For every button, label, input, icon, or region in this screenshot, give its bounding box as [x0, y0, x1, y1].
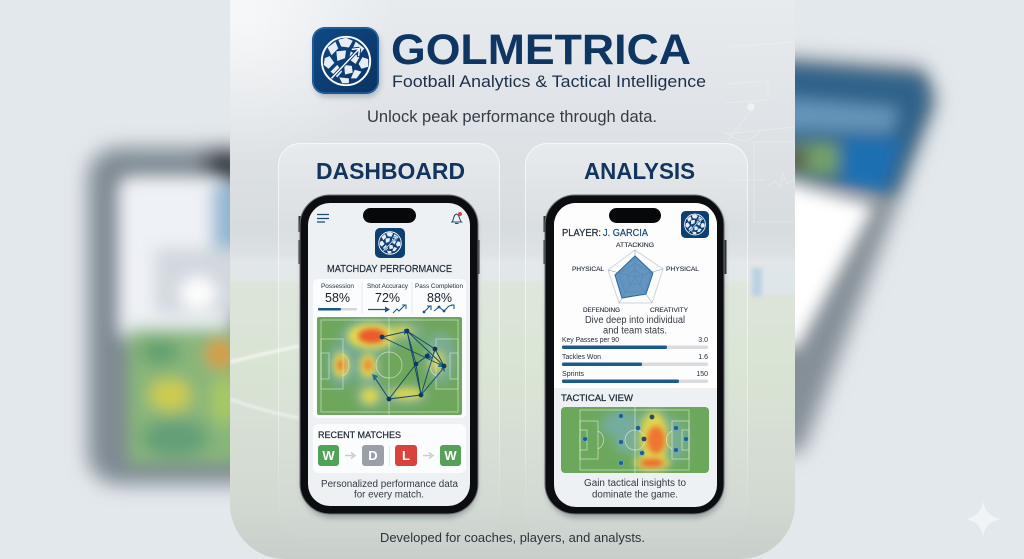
radar labels: DEFENDING	[583, 307, 620, 314]
stat: possession: 58%	[325, 291, 350, 305]
text: dive deep: Dive deep into individual	[585, 315, 685, 326]
heading: dashboard: DASHBOARD	[316, 158, 465, 184]
radar labels: ATTACKING	[616, 242, 654, 249]
logo	[312, 27, 380, 97]
caption: for every match.	[354, 490, 424, 500]
player name	[562, 228, 648, 239]
footer text: Developed for coaches, players, and analysts.	[380, 531, 645, 545]
pass network	[372, 329, 446, 401]
badge: loss: L	[402, 448, 410, 463]
text: dive deep	[585, 315, 685, 336]
stat: pass completion: Pass Completion	[415, 283, 463, 290]
notch	[363, 208, 416, 223]
stat bar: sprints: Sprints	[562, 371, 584, 378]
badge: draw: D	[368, 448, 378, 463]
recent matches card: RECENT MATCHES	[318, 430, 401, 440]
arrow	[345, 452, 355, 458]
icon: menu	[317, 214, 329, 222]
players	[583, 414, 688, 465]
phone: dashboard	[298, 195, 480, 518]
radar labels: CREATIVITY	[650, 307, 688, 314]
tactical pitch	[561, 407, 709, 473]
badge: draw	[362, 445, 384, 466]
stat bar: tackles	[562, 354, 708, 366]
badge: win: W	[444, 448, 457, 463]
stat bar: key passes: Key Passes per 90	[562, 337, 619, 344]
title: GOLMETRICA	[391, 26, 691, 74]
radar labels: PHYSICAL	[666, 266, 699, 273]
stats and heatmap card	[313, 279, 466, 418]
radar labels: PHYSICAL	[572, 266, 604, 273]
stat: pass completion	[415, 283, 463, 313]
icon: bell	[452, 212, 462, 224]
tagline: Unlock peak performance through data.	[367, 107, 657, 126]
stat bar: tackles: Tackles Won	[562, 354, 601, 361]
heatmap with pass network	[317, 317, 462, 415]
blurred left phone	[88, 148, 328, 484]
stat: shot accuracy: Shot Accuracy	[367, 283, 409, 290]
player name: PLAYER:	[562, 228, 601, 239]
badge: win: W	[322, 448, 335, 463]
stat: pass completion: 88%	[427, 291, 452, 305]
stat bar: tackles: 1.6	[698, 354, 708, 361]
player name: J. GARCIA	[603, 228, 648, 239]
subtitle: Football Analytics & Tactical Intelligence	[392, 73, 706, 91]
stat: possession	[318, 283, 357, 310]
stat bar: key passes	[562, 337, 708, 349]
stat bar: key passes: 3.0	[698, 337, 708, 344]
stat: shot accuracy	[367, 283, 409, 313]
caption: Personalized performance data	[321, 479, 458, 490]
stat bars	[562, 337, 708, 383]
center card background	[230, 0, 795, 559]
radar labels	[572, 242, 699, 314]
panel: dashboard	[278, 144, 500, 538]
blurred right phone	[770, 56, 938, 452]
heading: tactical view: TACTICAL VIEW	[561, 393, 633, 403]
arrow	[423, 452, 433, 458]
stat: shot accuracy: 72%	[375, 291, 400, 305]
radar chart	[572, 242, 699, 314]
panel: analysis	[526, 144, 748, 538]
caption: Gain tactical insights to	[584, 478, 686, 489]
caption	[584, 478, 686, 500]
recent matches card	[313, 424, 466, 473]
badge: win	[440, 445, 461, 466]
text: dive deep: and team stats.	[603, 326, 667, 336]
icon: sparkle	[966, 501, 1001, 537]
app logo	[681, 211, 709, 238]
app logo	[375, 228, 405, 258]
caption	[321, 479, 458, 500]
badge: loss	[395, 445, 417, 466]
phone: analysis	[544, 195, 726, 518]
stat bar: sprints: 150	[696, 371, 708, 378]
heading: matchday performance: MATCHDAY PERFORMANCE	[327, 264, 452, 275]
badge: win	[318, 445, 339, 466]
notch	[609, 208, 661, 223]
stat bar: sprints	[562, 371, 708, 383]
stat: possession: Possession	[321, 283, 354, 290]
heading: analysis: ANALYSIS	[584, 158, 695, 184]
caption: dominate the game.	[592, 490, 678, 500]
